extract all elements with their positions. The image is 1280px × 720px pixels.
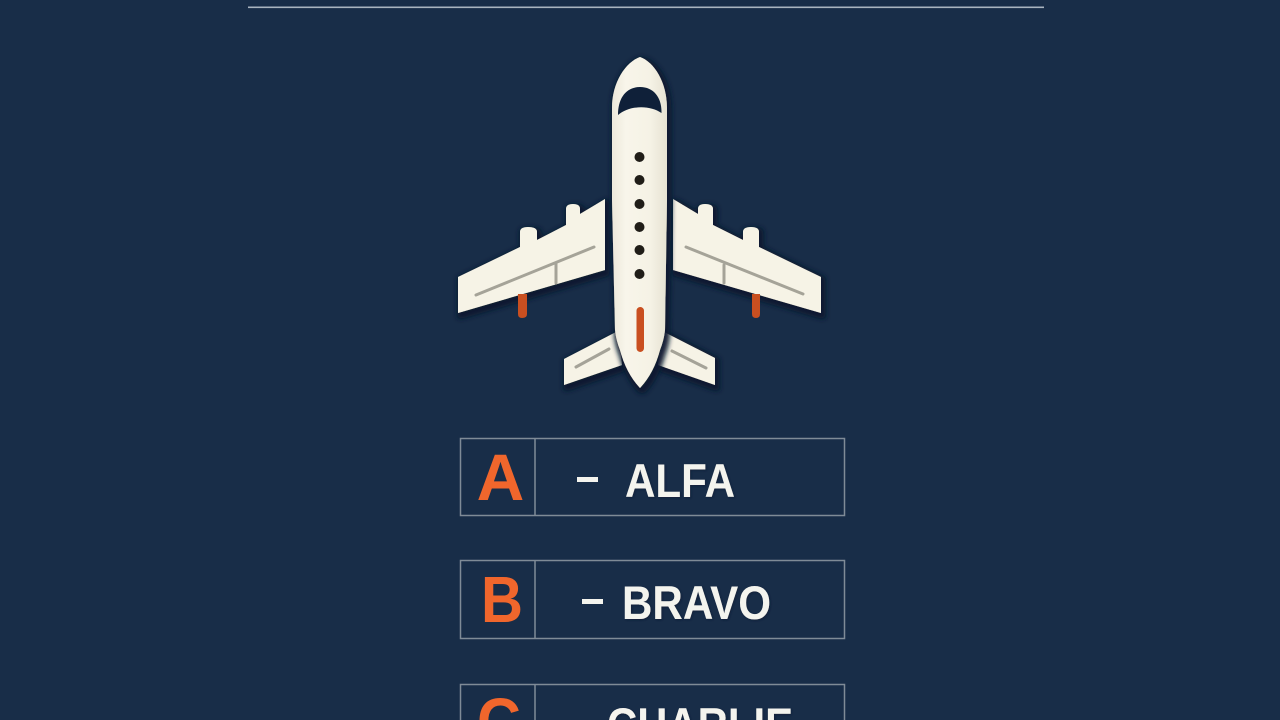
box: [460, 684, 844, 720]
icon: airplane: [458, 57, 821, 388]
dash: [577, 477, 598, 482]
letter A: A: [477, 440, 524, 514]
letter B: B: [481, 563, 523, 636]
box: [460, 560, 844, 638]
top rule: [248, 6, 1044, 8]
left tailplane: [564, 331, 622, 385]
left wing: [458, 199, 605, 313]
word ALFA: ALFA: [625, 454, 735, 507]
right wing: [673, 199, 821, 313]
row: B Bravo: [460, 560, 844, 638]
tail stripe: [636, 307, 644, 352]
box: [460, 438, 844, 516]
row: A Alfa: [460, 438, 844, 516]
cockpit window: [618, 87, 662, 115]
fuselage: [612, 57, 667, 388]
row: C Charlie: [460, 684, 844, 720]
dash: [582, 599, 603, 604]
left engine exhaust: [518, 294, 527, 318]
right tailplane: [658, 331, 715, 385]
cabin windows: [634, 152, 644, 279]
right engine exhaust: [752, 294, 760, 318]
word BRAVO: BRAVO: [622, 576, 771, 629]
